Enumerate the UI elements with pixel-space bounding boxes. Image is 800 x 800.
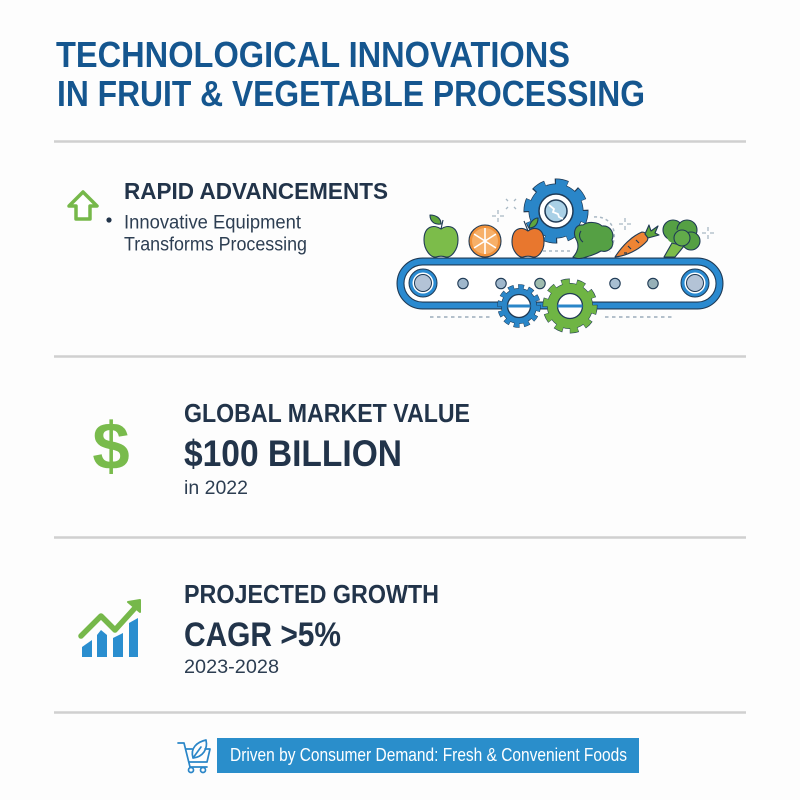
title: TECHNOLOGICAL INNOVATIONS (56, 34, 570, 75)
banner (217, 738, 639, 773)
value: $100 billion: $100 BILLION (184, 433, 402, 474)
icon: shopping cart with leaf (178, 740, 210, 772)
blue small gear (500, 287, 538, 325)
heading: projected growth: PROJECTED GROWTH (184, 579, 439, 609)
orange slice (469, 225, 501, 257)
large blue gear (528, 182, 584, 240)
illustration: conveyor belt with produce and gears (400, 182, 720, 330)
heading: rapid advancements: RAPID ADVANCEMENTS (124, 178, 388, 204)
red apple (512, 218, 544, 257)
broccoli right (663, 220, 700, 257)
panel: rapid advancements (69, 178, 388, 256)
footer callout (178, 738, 639, 773)
banner text: Driven by Consumer Demand: Fresh & Convenient Foods (230, 745, 627, 765)
pulley right (681, 269, 709, 297)
bullet text: Innovative Equipment (124, 212, 302, 234)
carrot (615, 225, 659, 257)
sparkles and dashed accents (430, 199, 714, 317)
note: in 2022: in 2022 (184, 478, 248, 499)
bullet text (106, 212, 307, 256)
note: years: 2023-2028 (184, 657, 279, 678)
icon: growth chart (81, 600, 140, 657)
broccoli left (573, 222, 613, 258)
title: IN FRUIT & VEGETABLE PROCESSING (57, 73, 645, 114)
icon: dollar sign: $ (92, 409, 130, 484)
conveyor belt (400, 262, 720, 306)
panel: projected growth (81, 579, 439, 678)
panel: global market value (92, 398, 470, 499)
pulley left (409, 269, 437, 297)
value: cagr: CAGR >5% (184, 616, 341, 654)
bullet text: Transforms Processing (124, 234, 307, 256)
green gear (546, 282, 594, 330)
rollers (458, 278, 658, 289)
green apple (424, 215, 458, 257)
icon: up arrow (69, 192, 97, 219)
heading: global market value: GLOBAL MARKET VALUE (184, 398, 470, 428)
title (56, 34, 645, 114)
